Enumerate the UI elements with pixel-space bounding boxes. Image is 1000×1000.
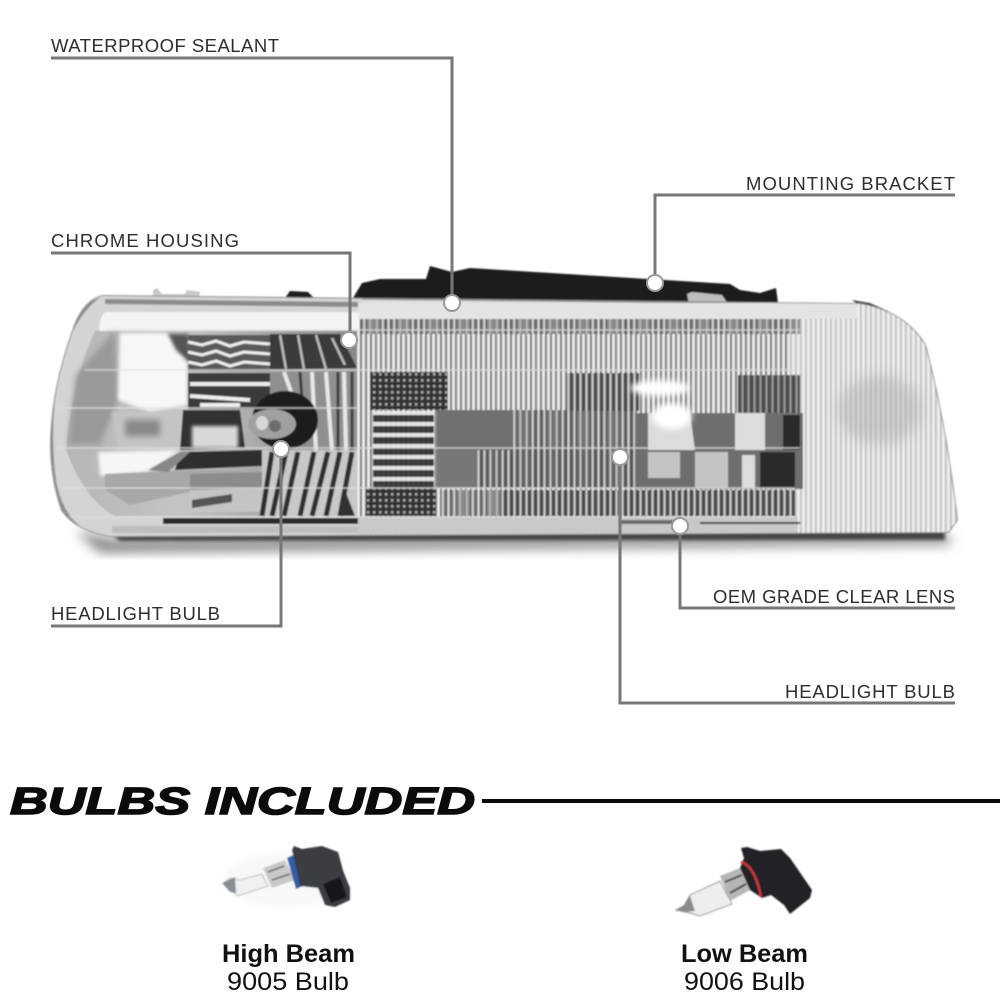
ground shadow <box>75 530 950 552</box>
callout: chrome housing <box>51 230 357 348</box>
callout: waterproof sealant: WATERPROOF SEALANT <box>51 35 279 56</box>
callout: headlight bulb (left): HEADLIGHT BULB <box>51 603 220 624</box>
lower dark rib band <box>503 490 795 516</box>
lower lamp chrome trim <box>163 518 358 524</box>
outer lens body <box>51 296 957 536</box>
callout: OEM grade clear lens: OEM GRADE CLEAR LENS <box>713 586 955 607</box>
chrome stripe block <box>373 411 434 488</box>
callout: OEM grade clear lens <box>672 518 955 608</box>
heading: bulbs included <box>10 781 1000 823</box>
dark upper-right reflector <box>270 334 357 370</box>
callout: waterproof sealant <box>51 35 460 311</box>
label: high beam <box>222 940 355 996</box>
icon: low beam 9006 bulb <box>676 847 812 916</box>
bottom textured strip <box>358 517 798 535</box>
mixed reflector window <box>635 413 803 489</box>
label: high beam: High Beam <box>222 940 355 968</box>
heading: bulbs included: BULBS INCLUDED <box>10 781 475 823</box>
left lamp housing <box>48 296 362 536</box>
bright flare <box>630 380 690 396</box>
reflector base <box>66 331 357 516</box>
headlight assembly photo <box>48 266 960 552</box>
label: low beam: Low Beam <box>681 940 808 968</box>
bulb in reflector <box>252 391 318 449</box>
label: low beam: 9006 Bulb <box>684 968 805 996</box>
wavy dark stripes in reflector <box>188 335 270 371</box>
callout: chrome housing: CHROME HOUSING <box>51 230 239 251</box>
label: high beam: 9005 Bulb <box>227 968 349 996</box>
callout: headlight bulb (right) <box>612 449 955 703</box>
callout: headlight bulb (left) <box>51 441 289 626</box>
grey inner reflector <box>437 410 513 450</box>
lower dark reflector <box>175 450 262 470</box>
center and side lens <box>358 303 960 535</box>
label: low beam <box>681 940 808 996</box>
mounting bracket (black plastic) <box>285 266 778 304</box>
callout: mounting bracket <box>647 173 955 291</box>
fluted reflector right of bulb <box>269 372 312 450</box>
small clips on top edge <box>153 288 200 298</box>
icon: high beam 9005 bulb <box>222 846 350 908</box>
dark ribbed windows <box>567 373 639 411</box>
horizontal lens grid lines <box>58 330 800 517</box>
callout: mounting bracket: MOUNTING BRACKET <box>746 173 955 194</box>
soft grey shade on side lens <box>838 376 922 444</box>
dotted texture block <box>370 372 448 410</box>
callout: headlight bulb (right): HEADLIGHT BULB <box>785 681 955 702</box>
